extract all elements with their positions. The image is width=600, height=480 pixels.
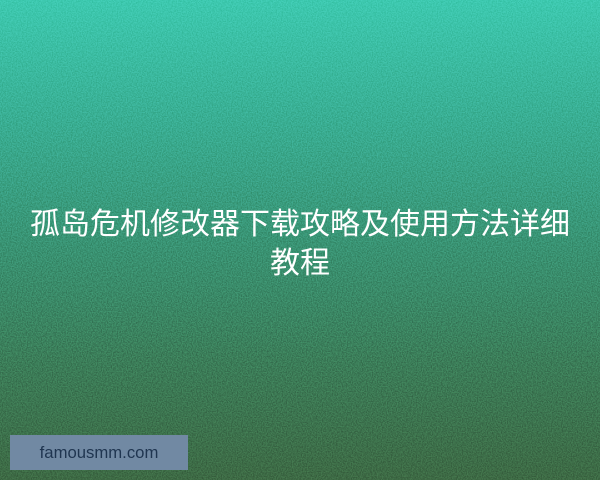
title: 孤岛危机修改器下载攻略及使用方法详细教程 <box>30 199 570 282</box>
watermark badge <box>10 435 188 470</box>
watermark badge: famousmm.com <box>40 443 158 462</box>
